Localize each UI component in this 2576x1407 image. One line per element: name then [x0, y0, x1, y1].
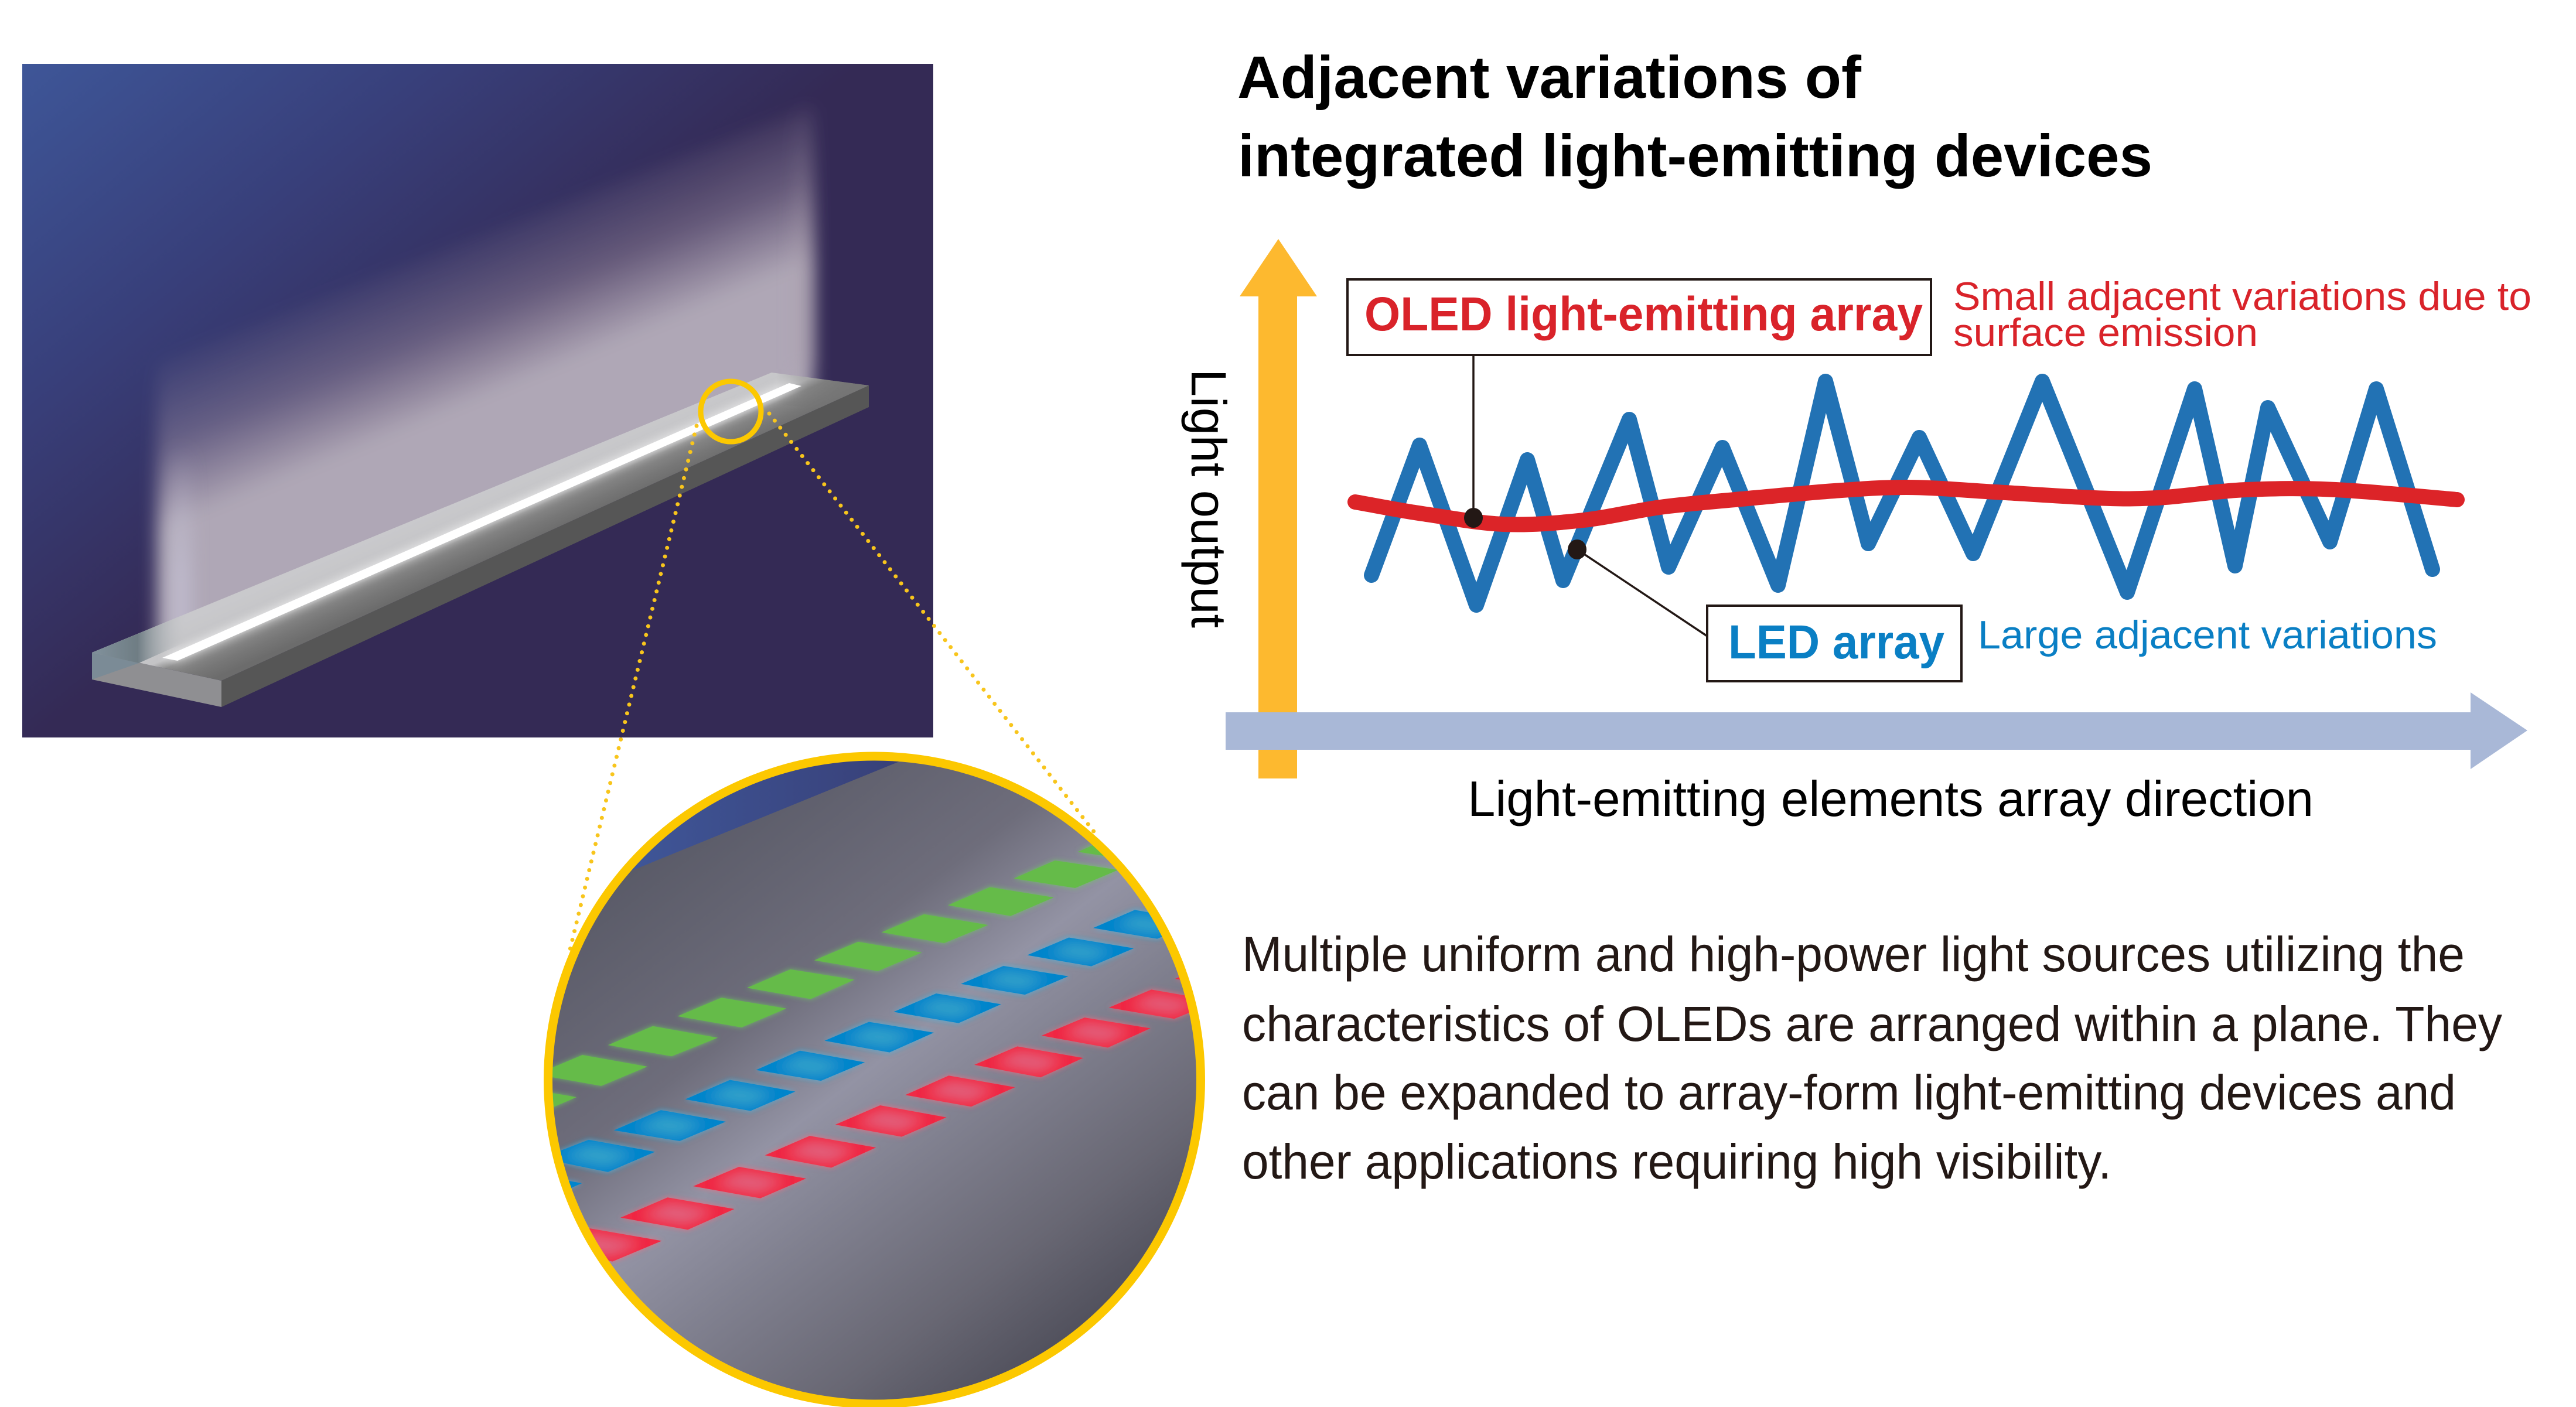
- translucent overlap on the end face: [92, 653, 139, 679]
- title: integrated light-emitting devices: [1238, 122, 2152, 189]
- green element row: [465, 834, 1182, 1118]
- LED label box: [1707, 606, 1961, 681]
- emitting white strip: [162, 383, 801, 661]
- y axis arrow: [1240, 239, 1317, 778]
- yellow circle border: [548, 756, 1201, 1404]
- x axis label: Light-emitting elements array direction: [1468, 771, 2314, 827]
- LED annotation: Large adjacent variations: [1978, 613, 2437, 657]
- chart: adjacent variations: [1181, 239, 2531, 827]
- body text: [1242, 927, 2502, 1189]
- dotted zoom guide lines: [570, 414, 1097, 950]
- red element row: [543, 960, 1285, 1262]
- magnified surface: [552, 761, 1196, 1400]
- LED array line: [1371, 381, 2432, 605]
- LED callout leader: [1568, 539, 1707, 636]
- bar end face: [92, 653, 221, 707]
- panel background: [22, 64, 933, 737]
- blue background corner: [527, 732, 899, 913]
- blue element row: [469, 910, 1200, 1203]
- OLED label box: [1347, 279, 1931, 355]
- y axis label: Light output: [1181, 369, 1236, 628]
- title: Adjacent variations of: [1237, 44, 1862, 111]
- darker right end of the bar top: [767, 373, 869, 408]
- glow around the emitting strip: [162, 383, 801, 661]
- light bar device: [92, 373, 869, 707]
- OLED annotation: [1953, 274, 2531, 355]
- light haze emitted from the bar: [157, 100, 814, 662]
- body text: can be expanded to array-form light-emitting devices and: [1242, 1065, 2456, 1120]
- panel: OLED light bar illustration: [22, 64, 933, 737]
- body text: Multiple uniform and high-power light sources utilizing the: [1242, 927, 2465, 982]
- magnified circle: RGB light-emitting elements: [544, 752, 1205, 1407]
- icon: yellow circle marking the zoomed area: [701, 381, 761, 442]
- LED label box: LED array: [1728, 616, 1944, 669]
- body text: characteristics of OLEDs are arranged within a plane. They: [1242, 996, 2502, 1051]
- magnified device surface and tiles: [552, 760, 1196, 1400]
- translucent left end of the bar top: [92, 612, 196, 663]
- OLED callout leader: [1464, 355, 1483, 528]
- bar top surface: [92, 373, 869, 681]
- OLED array line: [1355, 487, 2457, 525]
- title: [1237, 44, 2152, 189]
- OLED label box: OLED light-emitting array: [1364, 288, 1923, 341]
- OLED annotation: Small adjacent variations due to: [1953, 274, 2531, 319]
- OLED annotation: surface emission: [1953, 310, 2258, 355]
- bar long side face: [221, 385, 869, 707]
- body text: other applications requiring high visibility.: [1242, 1134, 2111, 1189]
- x axis arrow: [1226, 692, 2527, 769]
